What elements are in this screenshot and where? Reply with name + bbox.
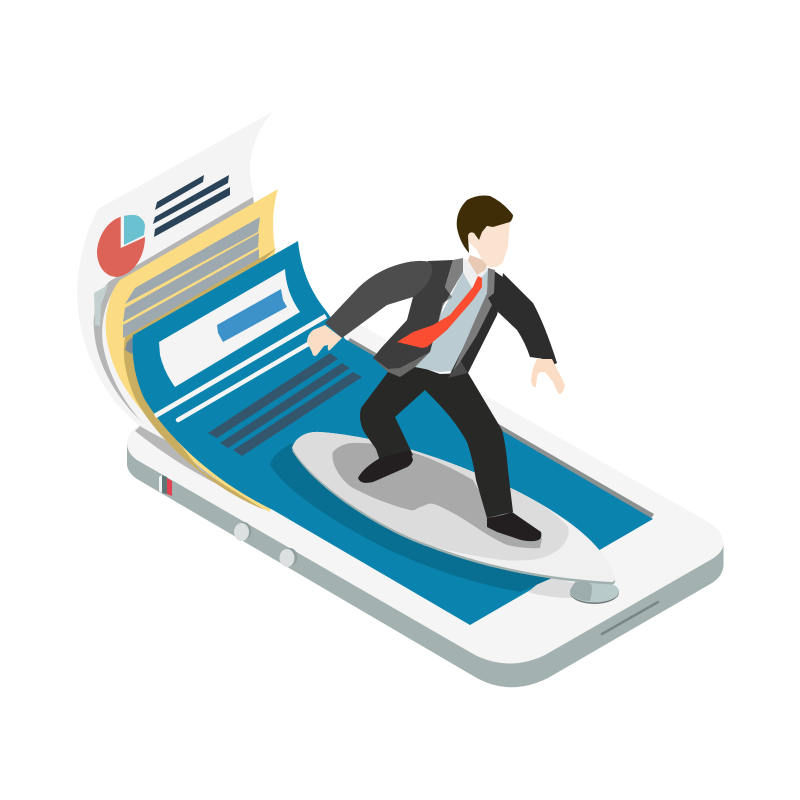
dark yellow shadow	[124, 248, 277, 510]
jacket right panel	[448, 270, 507, 378]
white document page	[77, 112, 272, 500]
board rim	[292, 434, 615, 584]
jacket left panel	[373, 260, 453, 369]
translucent tab	[94, 285, 108, 326]
white content box	[159, 269, 300, 387]
phone	[127, 319, 724, 687]
tie	[397, 276, 482, 348]
paper shadow band	[94, 197, 254, 425]
dark text lines	[208, 353, 362, 456]
side button one	[234, 522, 252, 541]
surfboard shadow on screen	[270, 443, 552, 592]
jacket hem	[373, 352, 430, 377]
right sleeve	[498, 273, 557, 365]
pie red slice	[97, 217, 145, 277]
left sleeve	[325, 261, 432, 338]
right lapel	[453, 268, 495, 371]
pie teal slice	[124, 215, 145, 245]
right shoe	[487, 512, 541, 541]
board dark traction pad	[332, 443, 542, 548]
neck	[468, 255, 488, 275]
home button	[570, 580, 619, 604]
shadow cast on phone	[135, 426, 248, 498]
grey text bands	[123, 217, 260, 338]
left lapel	[438, 258, 463, 325]
face	[467, 220, 510, 267]
jacket right hem	[448, 360, 468, 378]
right hand	[531, 359, 565, 394]
trousers	[360, 365, 513, 518]
phone top surface	[127, 319, 724, 664]
yellow sheet	[106, 189, 278, 512]
side switch	[159, 475, 172, 496]
white stripe two	[178, 343, 310, 420]
white stripe one	[155, 316, 326, 416]
board inner panel	[292, 432, 569, 560]
pie chart	[97, 215, 145, 277]
board tip	[292, 432, 615, 582]
businessman	[307, 196, 565, 541]
hair	[457, 196, 513, 253]
speaker slot	[602, 602, 658, 634]
surfboard	[292, 432, 615, 584]
shirt	[415, 268, 488, 372]
page sheet	[77, 112, 272, 500]
phone side edge	[127, 443, 724, 687]
text lines	[153, 175, 230, 237]
left shoe	[358, 450, 413, 483]
blue screen and page	[132, 241, 653, 625]
collar	[460, 259, 488, 290]
left hand	[307, 325, 342, 356]
blue button	[217, 289, 287, 342]
screen inner shadow strip	[345, 338, 654, 520]
side button two	[280, 548, 298, 567]
blue page sheet	[132, 241, 653, 625]
grey shadow under bands	[125, 336, 135, 354]
yellow document page	[106, 189, 278, 512]
surfboard shadow on phone	[528, 576, 582, 598]
